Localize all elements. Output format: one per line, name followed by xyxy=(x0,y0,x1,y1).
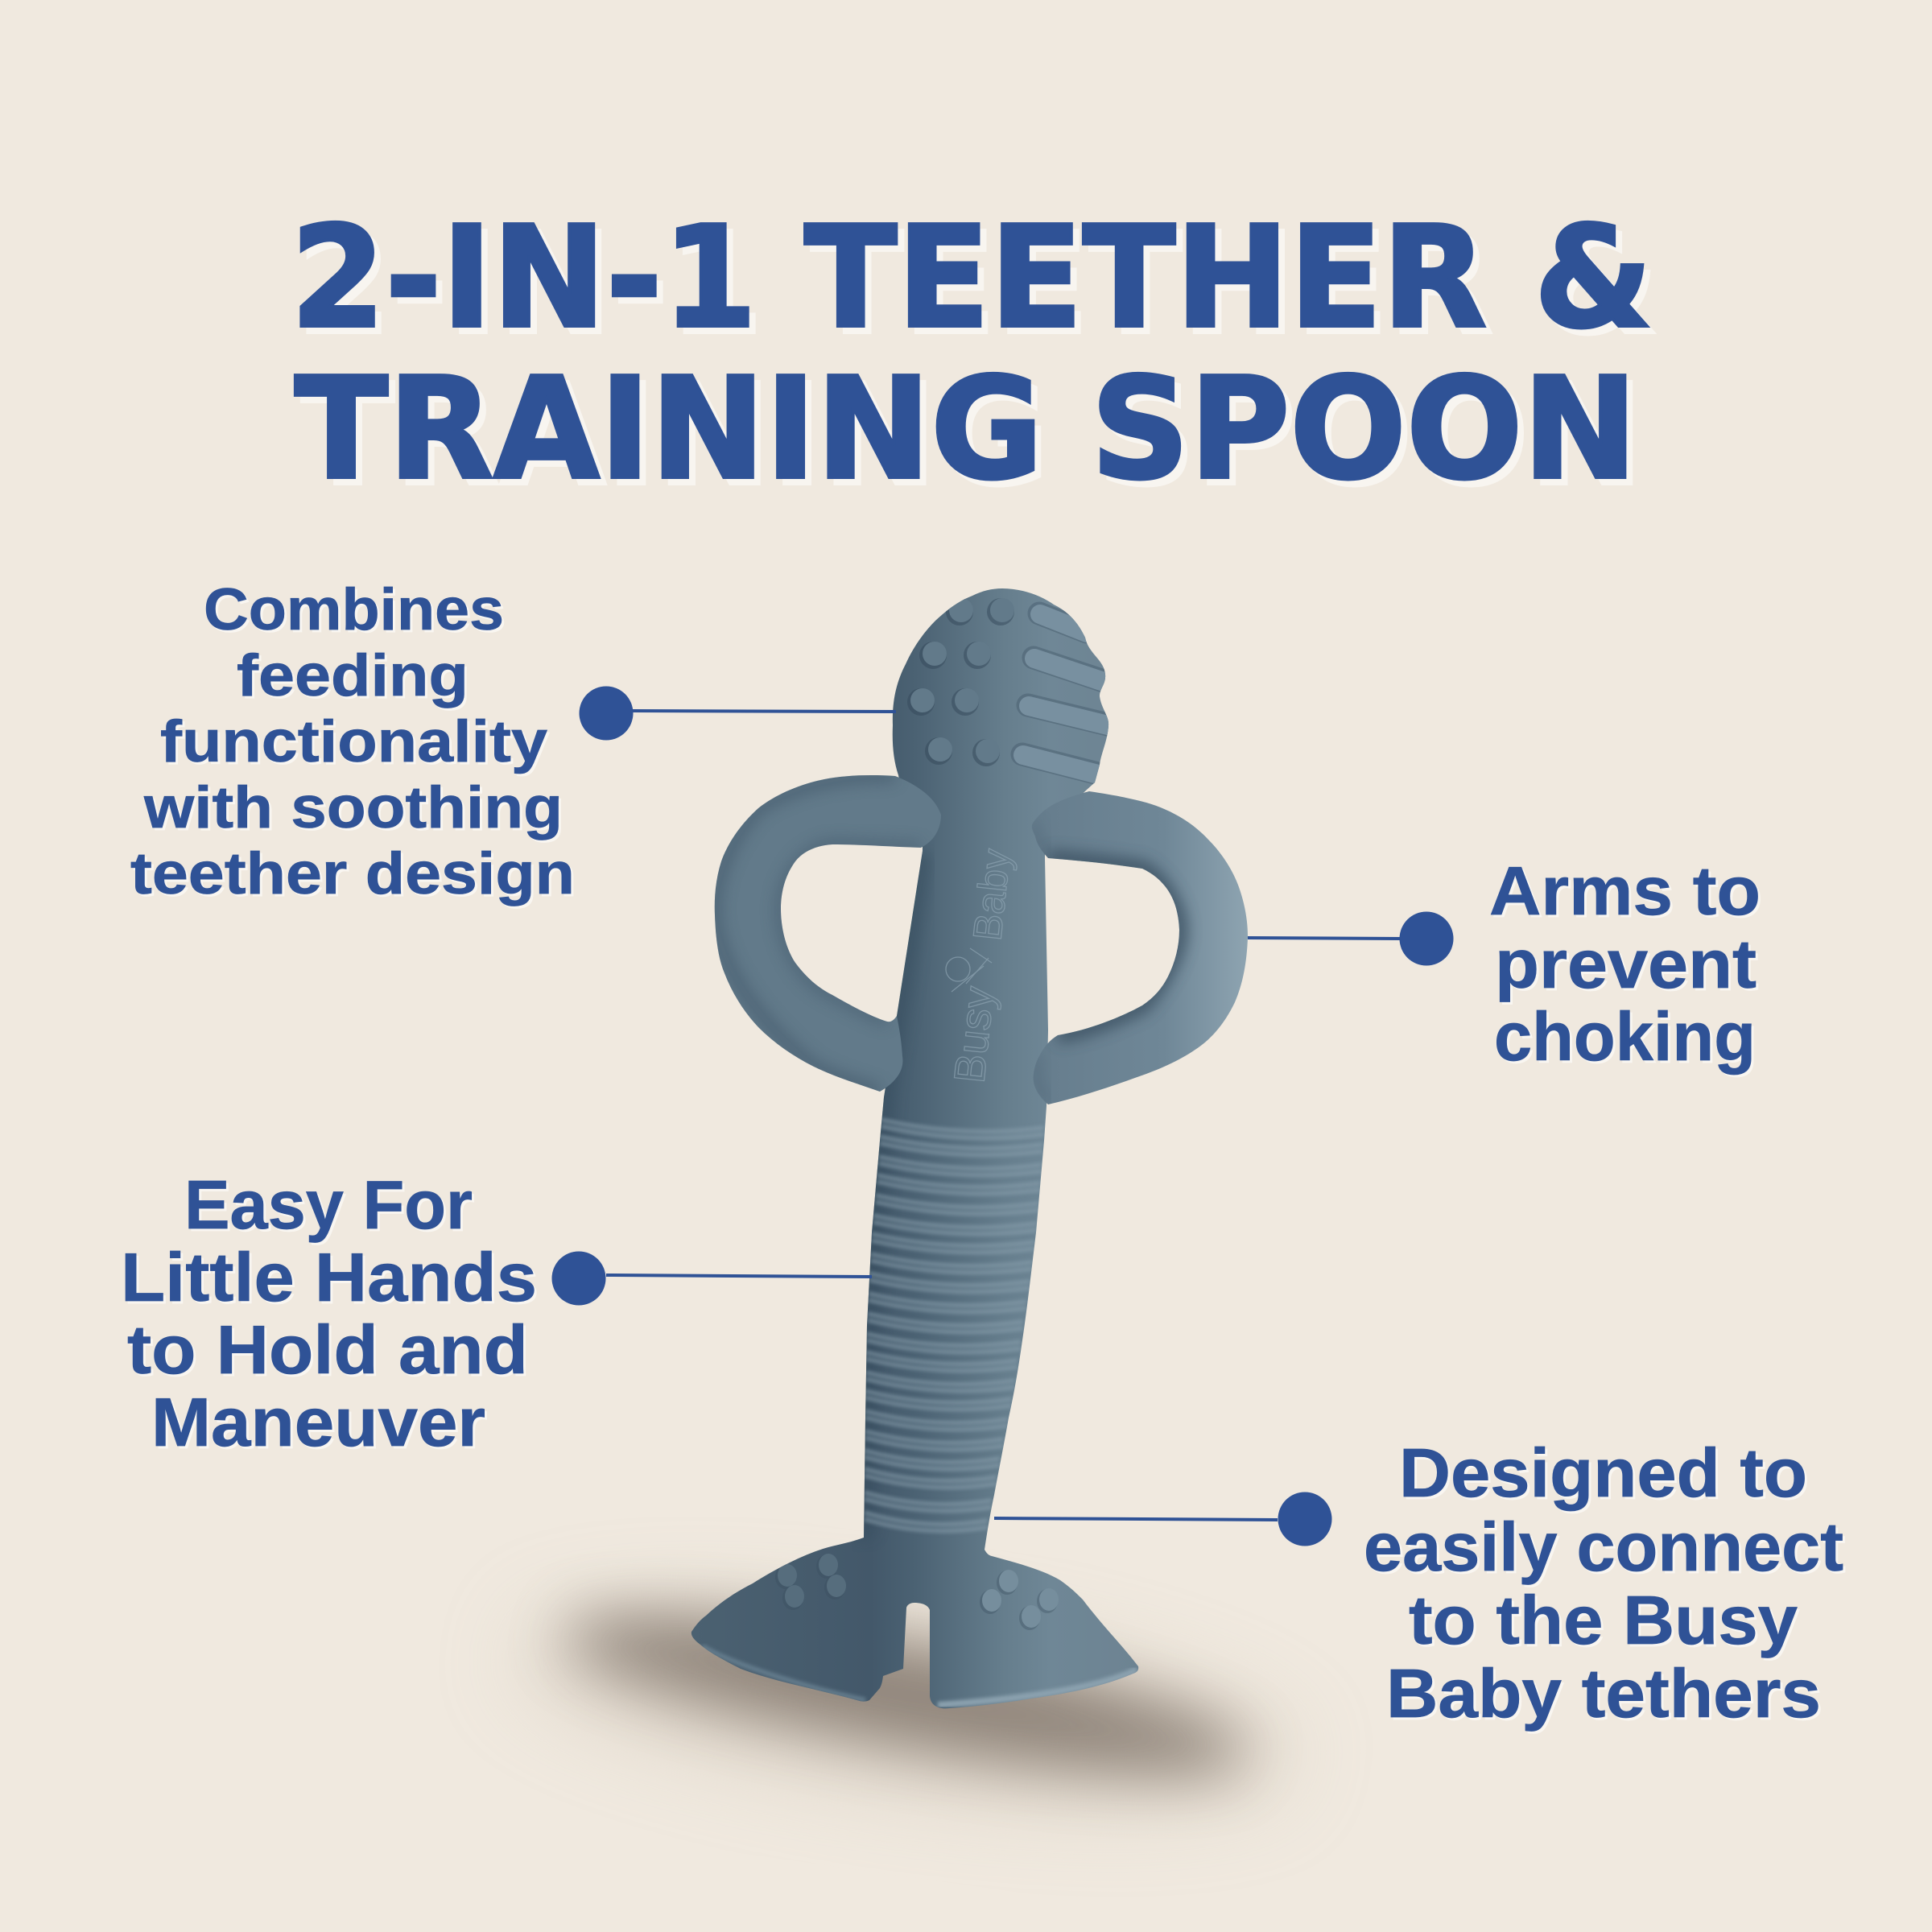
head nubs xyxy=(907,598,1014,766)
callout text: Designed to xyxy=(1399,1435,1807,1512)
title: TRAINING SPOON xyxy=(295,348,1637,511)
right arm loop xyxy=(1032,791,1248,1104)
product ground shadow xyxy=(512,1577,1299,1836)
callout text: Little Hands xyxy=(121,1240,537,1316)
callout text xyxy=(1489,853,1761,1075)
callout: little hands xyxy=(121,1167,872,1461)
foot slot flap and bottom rim xyxy=(702,1644,1138,1707)
callout text xyxy=(121,1167,537,1461)
callout text: teether design xyxy=(130,841,575,906)
callout pointer xyxy=(1248,911,1454,966)
callout text: to the Busy xyxy=(1409,1583,1798,1659)
callout text xyxy=(1364,1435,1843,1732)
embossed brand text xyxy=(945,847,1019,1085)
head ribs xyxy=(1022,613,1111,776)
title: 2-IN-1 TEETHER & xyxy=(291,196,1653,360)
callout pointer xyxy=(994,1492,1331,1546)
callout text: easily connect xyxy=(1364,1509,1843,1586)
callout: tethers xyxy=(994,1435,1843,1732)
callout text: to Hold and xyxy=(127,1312,528,1389)
callout text: with soothing xyxy=(143,775,563,840)
teether spoon product xyxy=(684,580,1256,1715)
callout text: feeding xyxy=(237,643,469,708)
callout pointer xyxy=(552,1251,872,1306)
callout: feeding and teether xyxy=(130,577,896,906)
callout text: Combines xyxy=(204,577,504,642)
callout text: choking xyxy=(1494,999,1756,1075)
ribbed handle xyxy=(865,1120,1044,1531)
foot nubs xyxy=(775,1554,1059,1630)
callout text: Easy For xyxy=(184,1167,473,1244)
embossed brand text: Baby xyxy=(964,847,1019,943)
title xyxy=(291,196,1653,511)
callout pointer xyxy=(580,686,896,741)
teether body silhouette xyxy=(684,580,1151,1715)
callout text: Baby tethers xyxy=(1386,1656,1821,1732)
callout text xyxy=(130,577,575,906)
callout text: Arms to xyxy=(1489,853,1761,930)
callout text: functionality xyxy=(160,709,547,774)
callout: arms xyxy=(1248,853,1761,1075)
embossed brand text: Busy xyxy=(945,985,1003,1085)
callout text: prevent xyxy=(1495,927,1757,1003)
left arm loop xyxy=(715,775,941,1092)
callout text: Maneuver xyxy=(151,1385,485,1461)
